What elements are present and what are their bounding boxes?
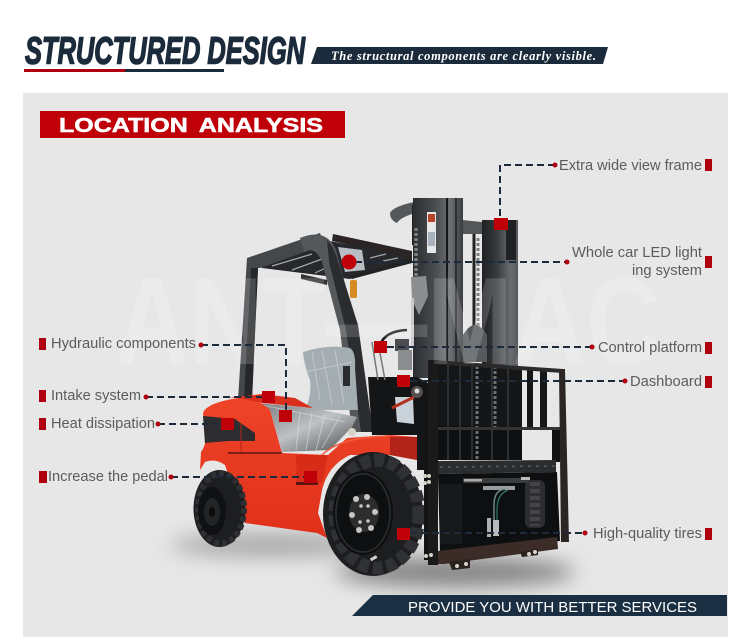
- callout: extra wide view frame: Extra wide view frame: [559, 158, 702, 174]
- callout: whole car LED lighting system: [342, 245, 712, 279]
- forklift illustration: [170, 198, 575, 587]
- amber warning light: [350, 280, 357, 298]
- callout: high-quality tires: [397, 526, 712, 542]
- rear wheel: [194, 470, 246, 547]
- title: Structured Design: [24, 30, 306, 72]
- callout: whole car LED lighting system: ing system: [632, 263, 702, 279]
- carriage and load backrest: [423, 360, 569, 570]
- callout: high-quality tires: High-quality tires: [593, 526, 702, 542]
- callout: control platform: [374, 340, 712, 356]
- operator controls and dash: [368, 330, 430, 470]
- mast: rear upright: [462, 220, 518, 370]
- lamp: [338, 247, 365, 272]
- callout: heat dissipation: [39, 416, 234, 432]
- callout: hydraulic components: [39, 336, 292, 422]
- callout: heat dissipation: Heat dissipation: [51, 416, 155, 432]
- front wheel: [323, 452, 423, 576]
- callout: dashboard: [397, 374, 712, 390]
- overhead guard: [238, 233, 412, 432]
- callout: increase the pedal: Increase the pedal: [48, 469, 168, 485]
- callout: control platform: Control platform: [598, 340, 702, 356]
- subtitle banner: The structural components are clearly visible.: [331, 49, 596, 63]
- callout: extra wide view frame: [494, 158, 712, 230]
- mast: front upright: [390, 198, 463, 378]
- heading: location analysis: [40, 111, 345, 138]
- plastic-wrapped engine cover: [255, 403, 357, 452]
- ground shadow: [170, 533, 575, 587]
- title: Structured Design: STRUCTURED DESIGN: [25, 30, 306, 72]
- red body: [200, 394, 417, 538]
- callout: increase the pedal: [39, 469, 317, 485]
- callout: intake system: [39, 388, 275, 404]
- footer banner: PROVIDE YOU WITH BETTER SERVICES: [408, 599, 697, 616]
- heading: location analysis: LOCATION ANALYSIS: [59, 115, 323, 137]
- seat: [303, 347, 358, 410]
- callout: dashboard: Dashboard: [630, 374, 702, 390]
- callout: whole car LED lighting system: Whole car LED light: [572, 245, 702, 261]
- callout: hydraulic components: Hydraulic components: [51, 336, 196, 352]
- footer banner: [352, 595, 727, 616]
- callout: intake system: Intake system: [51, 388, 141, 404]
